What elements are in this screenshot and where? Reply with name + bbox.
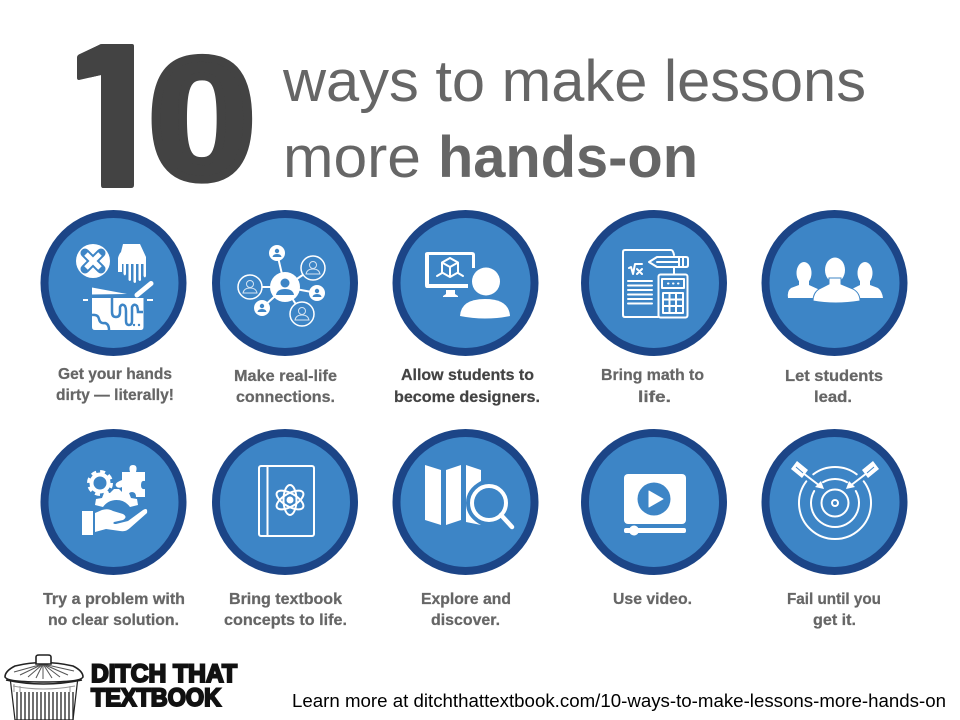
badge circle (766, 214, 904, 352)
label: Bring math to (601, 367, 704, 384)
badge circle (396, 433, 534, 571)
label (601, 367, 704, 406)
label (224, 591, 347, 629)
badge circle (216, 214, 354, 352)
icon: trash can (5, 655, 83, 720)
item: problem with no clear solution (43, 433, 185, 629)
icon: worksheet, pencil and calculator (623, 250, 688, 318)
label: Get your hands (58, 366, 172, 383)
logo: Ditch That Textbook (5, 655, 237, 720)
item: textbook concepts (216, 433, 354, 629)
label: Bring textbook (229, 591, 342, 608)
icon: hand holding gears and puzzle (82, 465, 147, 535)
badge circle (585, 433, 723, 571)
title (42, 0, 866, 222)
badge circle (44, 214, 182, 352)
big number 10 (77, 44, 252, 188)
label: discover. (431, 612, 500, 629)
icon: hand, cross and messy pot (76, 244, 153, 330)
label: Make real-life (234, 368, 337, 385)
icon: designer at monitor (425, 252, 510, 318)
label (787, 591, 881, 629)
logo wordmark (91, 660, 237, 712)
label: Try a problem with (43, 591, 185, 608)
big number 10: 1 (42, 0, 155, 222)
label: get it. (813, 612, 856, 629)
item: students lead (766, 214, 904, 406)
big number 10: 0 (148, 23, 256, 215)
label: Explore and (421, 591, 511, 608)
badge circle (396, 214, 534, 352)
badge circle (44, 433, 182, 571)
label (421, 591, 511, 629)
item: students as designers (394, 214, 540, 406)
label (394, 367, 540, 406)
icon: video player (624, 474, 686, 536)
icon: map and magnifier (425, 465, 512, 527)
item: get your hands dirty (44, 214, 182, 404)
label: connections. (236, 389, 335, 406)
label: Let students (785, 368, 883, 385)
logo wordmark: TEXTBOOK (91, 684, 221, 712)
label (43, 591, 185, 629)
badge circle (766, 433, 904, 571)
label (56, 366, 174, 404)
label: dirty — literally! (56, 387, 174, 404)
item: use video (585, 433, 723, 608)
label (234, 368, 337, 406)
item: math (585, 214, 723, 406)
title line 2: hands-on (438, 125, 698, 190)
icon: three people (788, 258, 883, 303)
label: become designers. (394, 389, 540, 406)
icon: target with arrows (791, 461, 879, 539)
item: explore and discover (396, 433, 534, 629)
footer link text: Learn more at ditchthattextbook.com/10-ways-to-make-lessons-more-hands-on (292, 690, 946, 711)
item: fail until you get it (766, 433, 904, 629)
label: Fail until you (787, 591, 881, 608)
item: real-life connections (216, 214, 354, 406)
badge circle (216, 433, 354, 571)
icon: book with atom (259, 466, 314, 536)
label: no clear solution. (48, 612, 179, 629)
label (785, 368, 883, 406)
label: concepts to life. (224, 612, 347, 629)
label: Use video. (613, 591, 692, 608)
badge circle (585, 214, 723, 352)
label: life. (638, 389, 671, 406)
logo wordmark: DITCH THAT (91, 660, 237, 688)
title line 1: ways to make lessons (282, 49, 866, 114)
label: Allow students to (401, 367, 534, 384)
label: lead. (814, 389, 852, 406)
icon: people network (238, 245, 325, 326)
title line 2: more (283, 125, 421, 190)
